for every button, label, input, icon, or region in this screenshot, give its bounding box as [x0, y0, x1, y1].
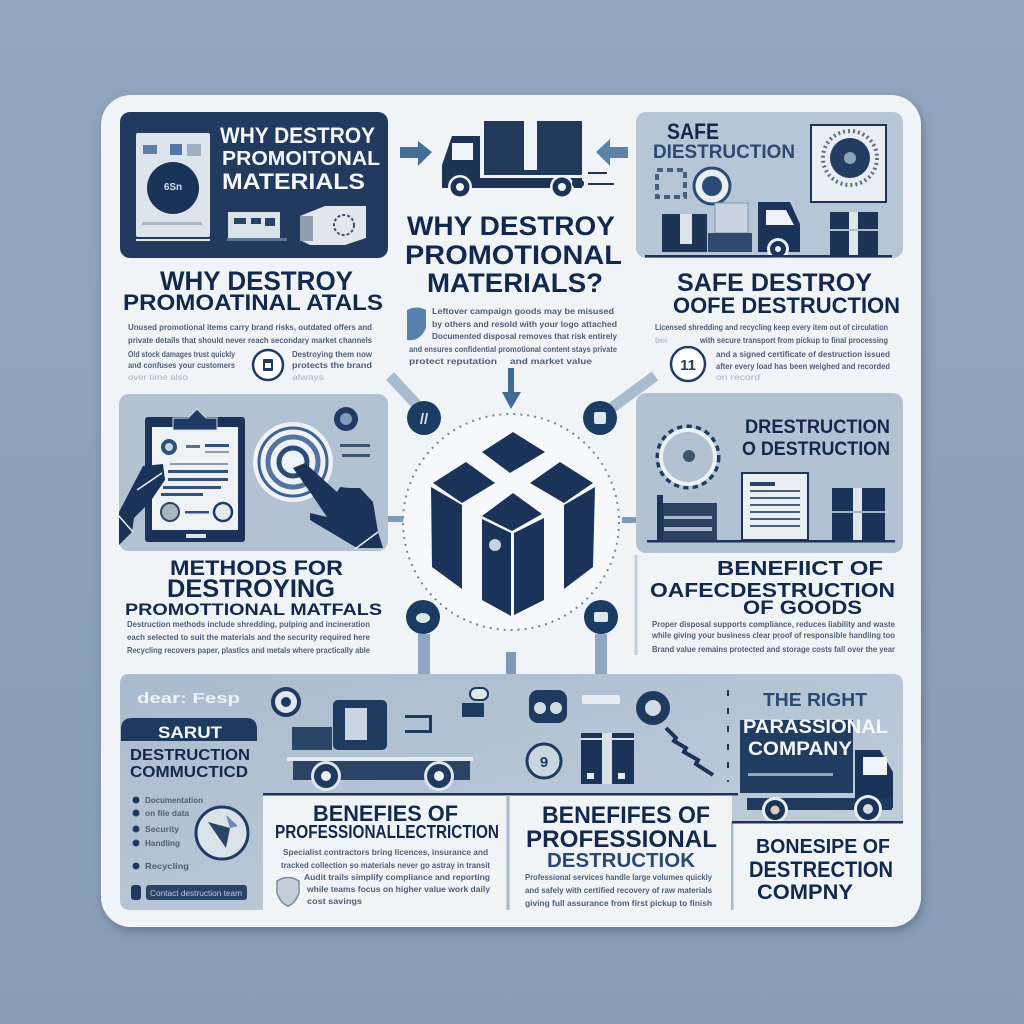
body text: giving full assurance from first pickup to finish [525, 898, 712, 908]
panel: the right company (bottom right): COMPANY [748, 739, 852, 760]
panel: safe destruction (top right): OOFE DESTRUCTION [673, 293, 900, 318]
section heading: METHODS FOR [170, 557, 343, 580]
connectors to the central box [382, 376, 655, 675]
image panel [636, 393, 903, 553]
body text: protect reputation [409, 356, 497, 366]
panel: the right company (bottom right) [732, 690, 903, 904]
image panel [119, 394, 388, 551]
image panel [636, 112, 903, 258]
clipboard [145, 409, 245, 542]
panel title: DRESTRUCTION [745, 417, 890, 438]
panel: benefits of professional destruction (bottom 3): PROFESSIONAL [526, 826, 717, 853]
zigzag line [666, 728, 713, 775]
checklist: Documentation [145, 795, 203, 805]
illustration: shredder icons [527, 690, 728, 784]
body text: Old stock damages trust quickly [128, 349, 235, 359]
body text: Recycling recovers paper, plastics and metals where practically able [127, 645, 370, 655]
faded top label: dear: Fesp [137, 690, 240, 707]
body text: tracked collection so materials never go astray in transit [281, 860, 490, 870]
icon: left hand [118, 464, 165, 545]
panel: why destroy (top left): PROMOATINAL ATALS [123, 290, 383, 315]
section heading: BENEFIFES OF [542, 802, 710, 829]
truck and boxes [645, 202, 892, 260]
body text: and ensures confidential promotional content stays private [409, 344, 617, 354]
panel title: THE RIGHT [763, 690, 867, 710]
body text: Proper disposal supports compliance, reduces liability and waste [652, 619, 895, 629]
body text [128, 322, 372, 382]
document [742, 473, 808, 540]
body text: on record [716, 372, 760, 382]
icon: number badge [671, 347, 705, 381]
body text: each selected to suit the materials and the security required here [127, 632, 370, 642]
body text: and confuses your customers [128, 360, 235, 370]
panel: benefits of safe destruction (middle right): OF GOODS [743, 598, 862, 619]
panel: methods (middle left) [118, 394, 388, 655]
panel: benefits of professional destruction (bottom 3) [525, 802, 717, 908]
center heading [405, 211, 622, 298]
body text: Audit trails simplify compliance and reporting [304, 872, 490, 882]
button: Contact destruction team [150, 889, 242, 898]
icon: gear [659, 428, 717, 486]
body text [651, 619, 896, 654]
icon: round badge [636, 691, 670, 725]
body text: private details that should never reach secondary market channels [128, 335, 372, 345]
body text: Leftover campaign goods may be misused [432, 306, 614, 316]
body text: and safely with certified recovery of raw materials [525, 885, 712, 895]
icon: badge top right [583, 401, 617, 435]
icon: badge [273, 689, 299, 715]
panel: center top [400, 121, 628, 366]
body text: Destroying them now [292, 349, 372, 359]
small label [340, 444, 370, 457]
panel: safety checklist (bottom left): COMMUCTICD [130, 764, 248, 781]
panel: benefits of professional destruction (bottom 3): DESTRUCTIOK [547, 850, 696, 872]
center heading: PROMOTIONAL [405, 240, 622, 270]
icon: company truck [740, 720, 893, 823]
box [832, 488, 885, 540]
body text: Professional services handle large volumes quickly [525, 872, 712, 882]
body text: over time also [128, 372, 188, 382]
panel: why destroy (top left): PROMOITONAL [222, 148, 380, 170]
bottom image band [120, 674, 903, 910]
central box graphic [403, 414, 619, 630]
body text [655, 322, 890, 382]
panel title: SAFE [667, 119, 719, 144]
arrow: left [400, 141, 432, 166]
box label [489, 539, 501, 551]
arrow: down to box [502, 368, 521, 409]
panel: why destroy (top left): MATERIALS [222, 169, 365, 194]
body text: Brand value remains protected and storage costs fall over the year [652, 644, 896, 654]
checklist: Handling [145, 838, 180, 848]
button [131, 885, 247, 900]
box [431, 432, 595, 616]
checklist: Security [145, 824, 179, 834]
panel title: DESTRUCTION [130, 747, 250, 764]
icon: pointing hand [293, 463, 383, 549]
body text: and market value [510, 356, 592, 366]
dark header [121, 718, 257, 741]
body text: bei [655, 335, 667, 345]
body text: always [292, 372, 324, 382]
main card [101, 95, 921, 927]
center heading: WHY DESTROY [407, 211, 615, 241]
icon badges around the box [406, 401, 618, 634]
body text [127, 619, 370, 655]
icon: badge top left: // [420, 411, 429, 428]
panel: safe destruction (top right): DIESTRUCTION [653, 142, 795, 163]
panel: why destroy (top left) [120, 112, 388, 382]
poster illustration: 6Sn [164, 182, 182, 193]
panel: safety checklist (bottom left): SARUT [158, 723, 223, 742]
icon: badge bottom left [406, 600, 440, 634]
arrow: right [596, 139, 628, 166]
checklist: on file data [145, 808, 189, 818]
white panel title: WHY DESTROY [220, 123, 375, 148]
panel: benefits of safe destruction (middle right) [636, 393, 903, 654]
body text: with secure transport from pickup to final processing [699, 335, 888, 345]
panel: safe destruction (top right) [636, 112, 903, 382]
icon: hands badge [529, 690, 567, 723]
body text: after every load has been weighed and recorded [716, 361, 890, 371]
body text [281, 847, 490, 906]
illustration: flatbed truck [263, 688, 738, 796]
poster illustration [136, 133, 210, 241]
section heading: WHY DESTROY [160, 266, 353, 296]
panel: safety checklist (bottom left) [121, 690, 257, 900]
shredder machine [657, 495, 717, 541]
section heading: BENEFIES OF [313, 801, 458, 826]
icon: shield [277, 878, 299, 906]
body text: Documented disposal removes that risk entirely [432, 331, 617, 341]
icon: badge top left [407, 401, 441, 435]
panel: benefits of safe destruction (middle right): OAFECDESTRUCTION [650, 580, 895, 602]
body text: Unused promotional items carry brand risks, outdated offers and [128, 322, 372, 332]
truck lettering: PARASSIONAL [743, 717, 888, 738]
certificate seal [811, 125, 886, 202]
panel: methods (middle left): PROMOTTIONAL MATFALS [125, 600, 382, 619]
body text: Specialist contractors bring licences, insurance and [283, 847, 488, 857]
body text: while teams focus on higher value work daily [306, 884, 490, 894]
box [581, 733, 634, 784]
dashed ring [403, 414, 619, 630]
body text [525, 872, 712, 908]
icon: number badge: 11 [680, 357, 696, 374]
dark image panel [120, 112, 388, 258]
dotted divider [727, 690, 729, 782]
section heading: SAFE DESTROY [677, 269, 872, 297]
icon: number badge [527, 744, 561, 778]
body text: protects the brand [292, 360, 372, 370]
icon: number badge: 9 [540, 754, 548, 771]
panel: benefits of professional destruction (bottom 2) [275, 801, 499, 906]
icon: badge [657, 168, 730, 204]
carton [300, 206, 366, 245]
panel: the right company (bottom right): DESTRECTION [749, 857, 893, 882]
icon: target [253, 422, 333, 502]
icon: small badge [334, 407, 358, 431]
panel: benefits of professional destruction (bottom 2): PROFESSIONALLECTRICTION [275, 822, 499, 842]
panel: benefits of safe destruction (middle right): O DESTRUCTION [742, 439, 890, 460]
leaflet [227, 212, 287, 241]
checklist: Recycling [145, 861, 189, 871]
body text: while giving your business clear proof of responsible handling too [651, 630, 895, 640]
section heading: BONESIPE OF [756, 836, 890, 858]
body text: by others and resold with your logo attached [432, 319, 617, 329]
body text: Destruction methods include shredding, pulping and incineration [127, 619, 370, 629]
icon: delivery truck [442, 121, 614, 199]
body text [409, 306, 617, 366]
icon: phone badge [253, 350, 283, 380]
icon: badge bottom right [584, 600, 618, 634]
small label [582, 695, 620, 704]
icon: shield [407, 308, 426, 340]
body text: and a signed certificate of destruction issued [716, 349, 890, 359]
body text: cost savings [307, 896, 362, 906]
panel: methods (middle left): DESTROYING [167, 575, 335, 603]
panel: the right company (bottom right): COMPNY [757, 881, 853, 904]
icon: compass badge [196, 807, 248, 859]
center heading: MATERIALS? [427, 268, 603, 298]
checklist [132, 795, 203, 871]
body text: Licensed shredding and recycling keep every item out of circulation [655, 322, 888, 332]
section heading: BENEFIICT OF [717, 558, 883, 580]
